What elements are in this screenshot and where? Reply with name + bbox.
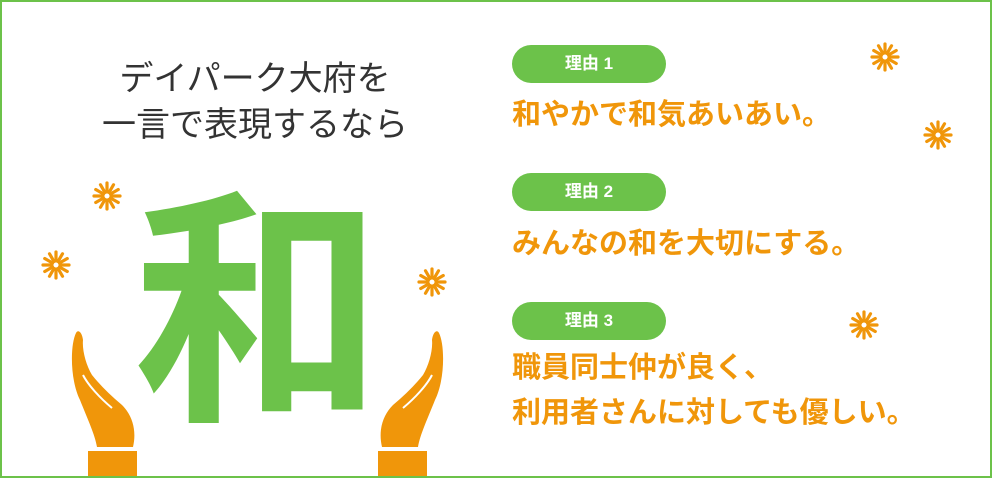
reason 1 text: 和やかで和気あいあい。 — [512, 99, 831, 131]
reason 3 text: 利用者さんに対しても優しい。 — [512, 397, 916, 429]
reason 3 text: 職員同士仲が良く、 — [512, 352, 773, 384]
icon: right hand — [378, 331, 443, 476]
pill: reason 3 — [512, 302, 666, 340]
title: デイパーク大府を — [119, 60, 391, 98]
pill: reason 1 — [512, 45, 666, 83]
title — [102, 60, 408, 144]
pill: reason 2 — [512, 173, 666, 211]
icon: left hand — [72, 331, 137, 476]
reason 2 text: みんなの和を大切にする。 — [512, 228, 860, 260]
pill: reason 1: 理由 1 — [565, 54, 613, 73]
reason 3 text — [512, 352, 916, 429]
kanji 和: 和 — [133, 175, 383, 454]
pill: reason 2: 理由 2 — [565, 182, 613, 201]
pill: reason 3: 理由 3 — [565, 311, 613, 330]
title: 一言で表現するなら — [102, 106, 408, 144]
icon: flowers — [43, 44, 951, 338]
